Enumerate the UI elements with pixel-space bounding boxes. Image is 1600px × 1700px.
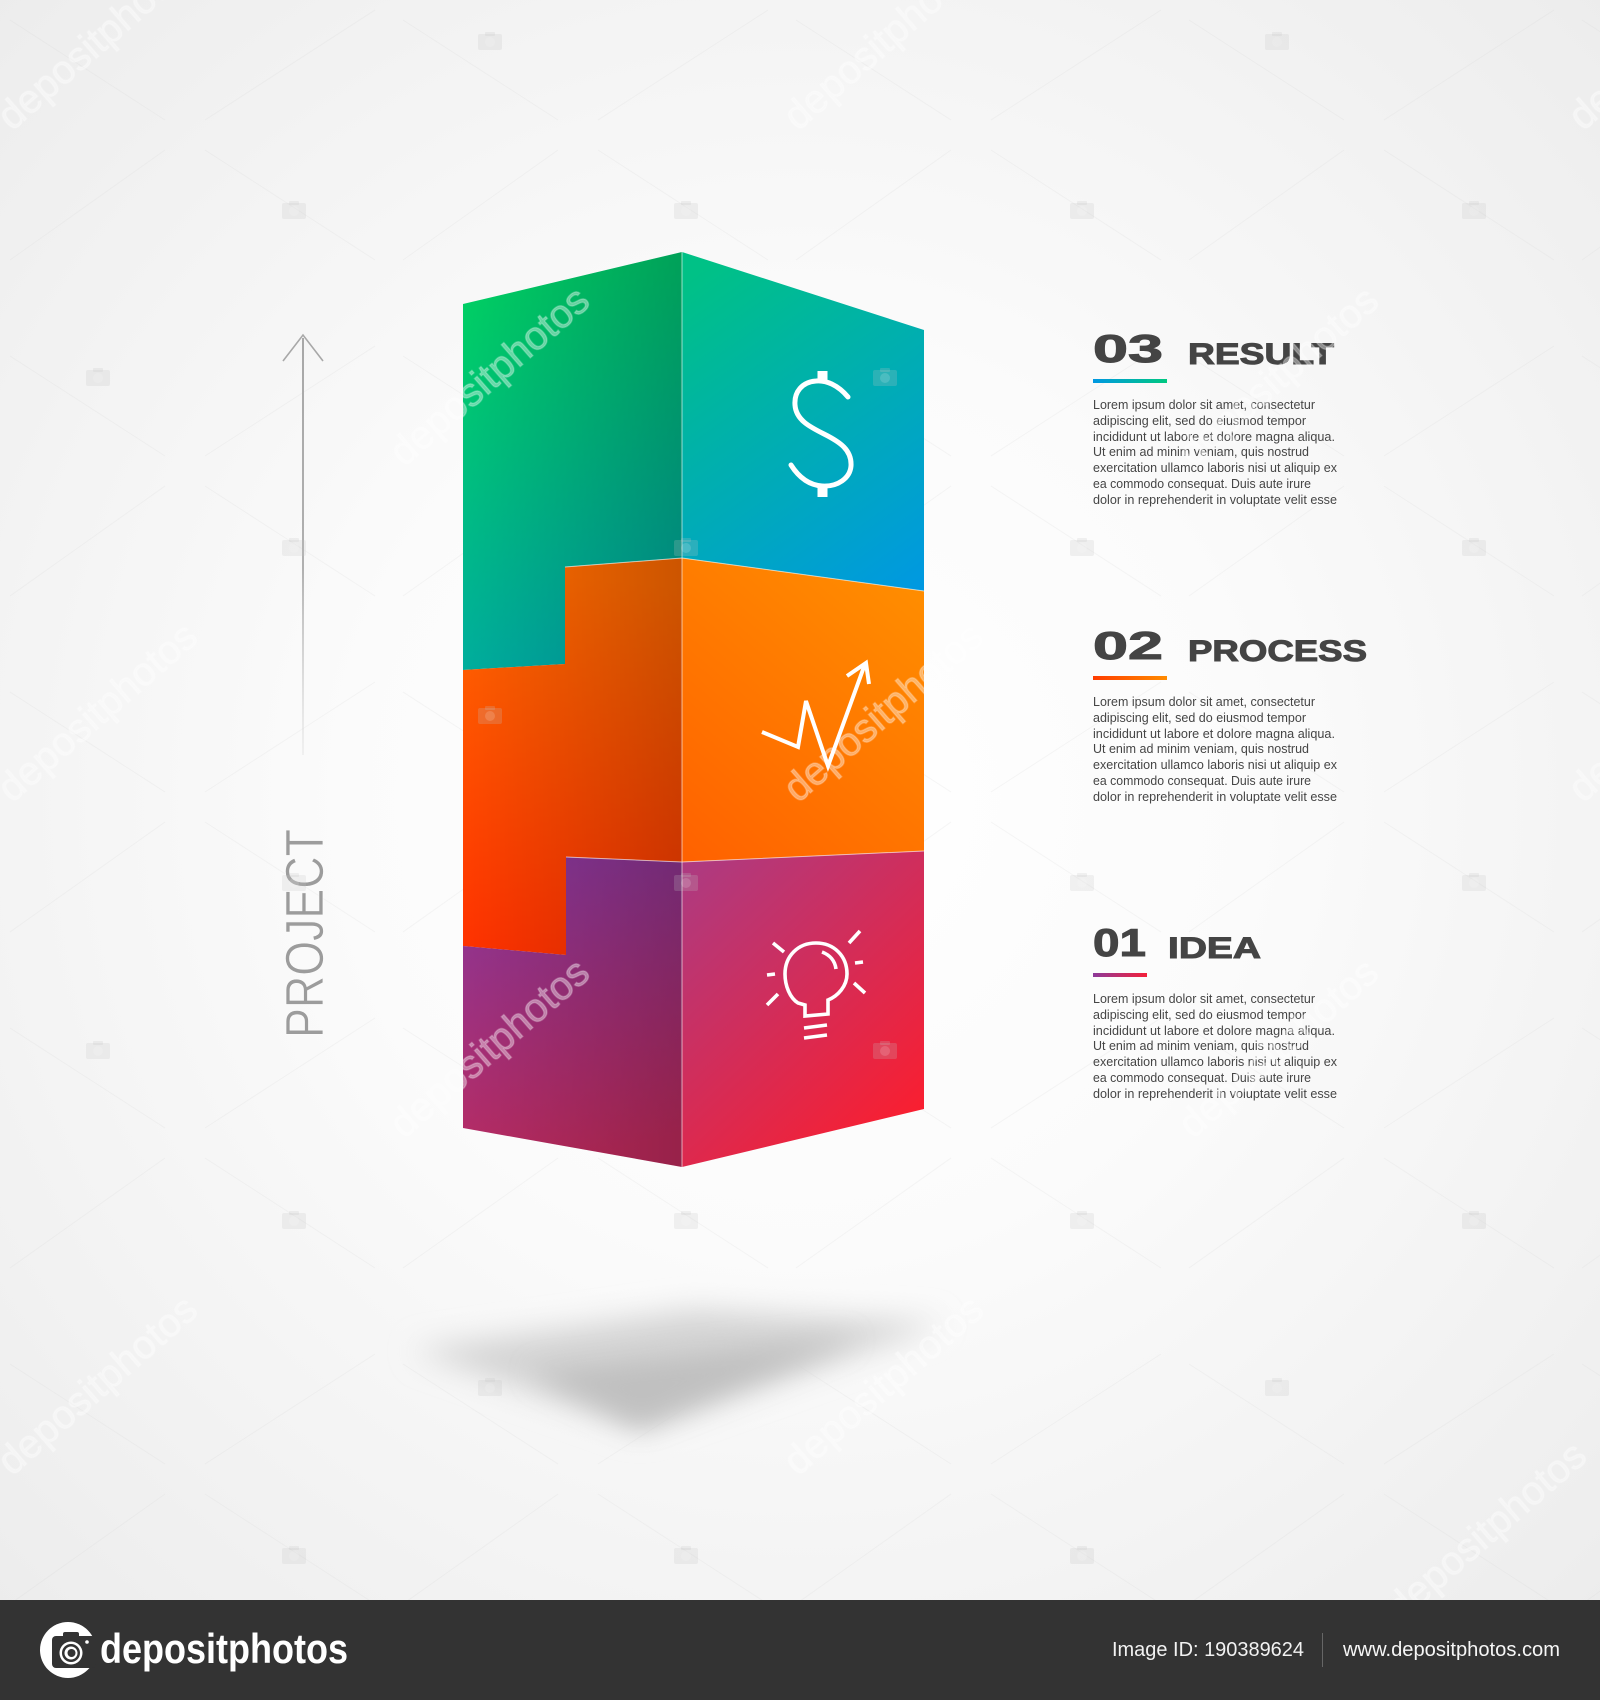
body text: Ut enim ad minim veniam, quis nostrud — [1093, 444, 1309, 459]
body text: adipiscing elit, sed do eiusmod tempor — [1093, 710, 1307, 725]
watermark overlay: depositphotos — [1170, 278, 1387, 475]
number 01: 01 — [1093, 922, 1146, 965]
body text: exercitation ullamco laboris nisi ut aliquip ex — [1093, 1054, 1337, 1069]
body text: dolor in reprehenderit in voluptate velit esse — [1093, 492, 1337, 507]
watermark overlay: depositphotos — [381, 950, 598, 1147]
underline — [1093, 973, 1147, 977]
heading idea: IDEA — [1168, 932, 1261, 965]
body text — [1093, 694, 1337, 804]
image id: Image ID: 190389624 — [1112, 1639, 1304, 1661]
watermark overlay: depositphotos — [381, 278, 598, 475]
panel: idea right face — [682, 851, 924, 1167]
project axis label: PROJECT — [275, 829, 335, 1038]
body text: exercitation ullamco laboris nisi ut aliquip ex — [1093, 460, 1337, 475]
footer bar — [0, 1600, 1600, 1700]
body text — [1093, 991, 1337, 1101]
floor shadow — [412, 1310, 943, 1431]
underline — [1093, 676, 1167, 680]
body text: adipiscing elit, sed do eiusmod tempor — [1093, 413, 1307, 428]
heading process: PROCESS — [1188, 635, 1367, 668]
number 02: 02 — [1093, 625, 1163, 668]
body text — [1093, 397, 1337, 507]
body text: ea commodo consequat. Duis aute irure — [1093, 476, 1311, 491]
icon: rising chart arrow — [762, 663, 869, 766]
body text: Lorem ipsum dolor sit amet, consectetur — [1093, 991, 1316, 1006]
body text: Ut enim ad minim veniam, quis nostrud — [1093, 741, 1309, 756]
panel: idea left face — [463, 857, 682, 1167]
footer logo wordmark: depositphotos — [100, 1625, 348, 1672]
3d column — [463, 252, 924, 1167]
section: 02 process — [1093, 625, 1367, 804]
body text: Lorem ipsum dolor sit amet, consectetur — [1093, 694, 1316, 709]
body text: dolor in reprehenderit in voluptate velit esse — [1093, 1086, 1337, 1101]
body text: dolor in reprehenderit in voluptate velit esse — [1093, 789, 1337, 804]
column seams — [565, 252, 924, 1167]
body text: Lorem ipsum dolor sit amet, consectetur — [1093, 397, 1316, 412]
watermark overlay: depositphotos — [1170, 950, 1387, 1147]
body text: Ut enim ad minim veniam, quis nostrud — [1093, 1038, 1309, 1053]
body text: incididunt ut labore et dolore magna aliqua. — [1093, 1023, 1335, 1038]
body text: ea commodo consequat. Duis aute irure — [1093, 1070, 1311, 1085]
number 03: 03 — [1093, 328, 1163, 371]
section: 01 idea — [1093, 922, 1337, 1101]
watermark overlay: depositphotos — [775, 614, 992, 811]
icon: light bulb — [767, 931, 865, 1038]
watermark overlay: depositphotos — [775, 1287, 992, 1484]
watermark overlay: depositphotos — [1378, 1433, 1595, 1630]
body text: ea commodo consequat. Duis aute irure — [1093, 773, 1311, 788]
project arrow — [283, 335, 323, 755]
panel: process right face — [682, 558, 924, 862]
panel: result right face — [682, 252, 924, 591]
panel: process left face — [463, 558, 682, 955]
body text: incididunt ut labore et dolore magna aliqua. — [1093, 726, 1335, 741]
panel: result left face — [463, 252, 682, 670]
heading result: RESULT — [1188, 338, 1334, 371]
body text: adipiscing elit, sed do eiusmod tempor — [1093, 1007, 1307, 1022]
section: 03 result — [1093, 328, 1337, 507]
body text: incididunt ut labore et dolore magna aliqua. — [1093, 429, 1335, 444]
icon: dollar sign — [791, 371, 851, 497]
website: www.depositphotos.com — [1342, 1639, 1560, 1661]
footer logo icon — [40, 1622, 96, 1678]
body text: exercitation ullamco laboris nisi ut aliquip ex — [1093, 757, 1337, 772]
underline — [1093, 379, 1167, 383]
